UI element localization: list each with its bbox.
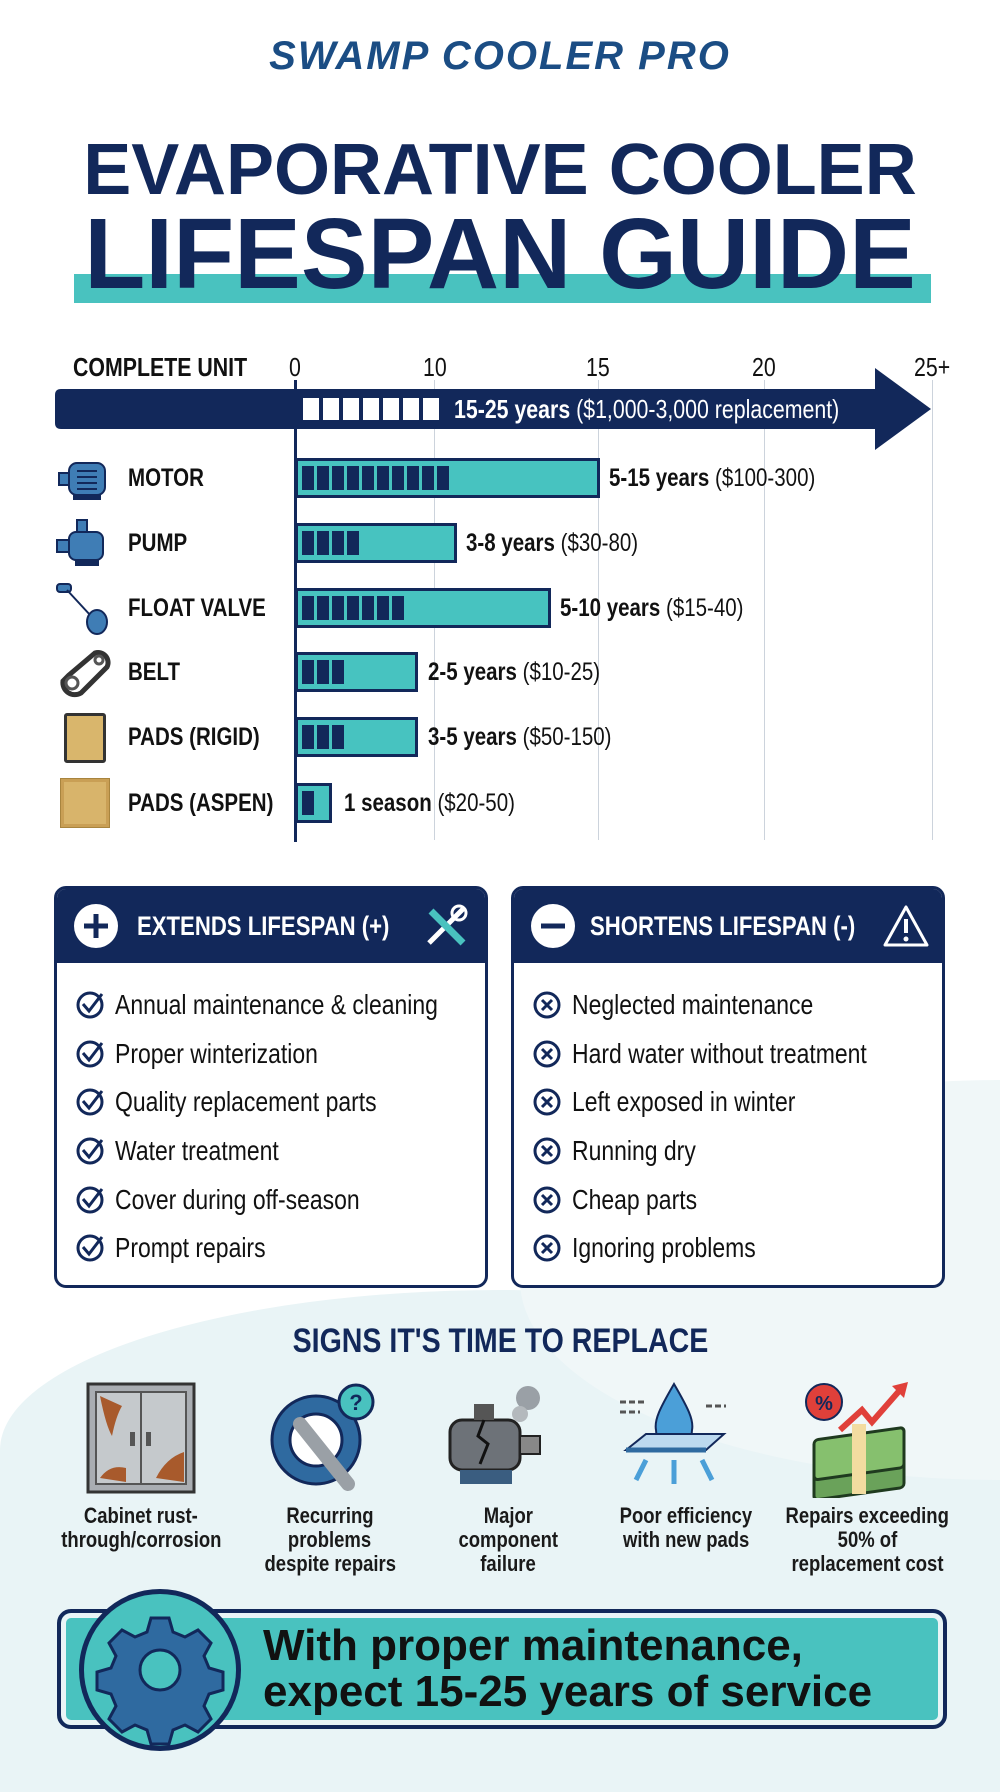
axis labels: 10 — [423, 352, 447, 382]
panel: extends lifespan — [54, 886, 488, 1288]
icon: gear wrench: ? — [349, 1390, 363, 1415]
text: PADS (ASPEN) — [128, 789, 273, 817]
panel header — [514, 889, 942, 963]
background wave — [0, 1290, 1000, 1792]
complete unit arrow — [55, 368, 931, 450]
text: 50% of — [837, 1527, 897, 1552]
icon: money — [805, 1382, 908, 1498]
icon: water drop efficiency — [620, 1382, 726, 1484]
text: FLOAT VALVE — [128, 594, 266, 622]
panel: shortens lifespan: Cheap parts — [572, 1184, 697, 1215]
row: motor — [58, 462, 106, 500]
text: MOTOR — [128, 464, 204, 492]
row: belt — [60, 650, 111, 698]
icon: rusty cabinet — [86, 1382, 196, 1494]
panel: shortens lifespan: Neglected maintenance — [572, 989, 813, 1020]
panel: shortens lifespan: Running dry — [572, 1135, 696, 1166]
axis labels — [73, 352, 950, 382]
axis labels: 25+ — [914, 352, 950, 382]
text: 3-5 years ($50-150) — [428, 723, 612, 751]
text: BELT — [128, 658, 180, 686]
text: Major — [483, 1503, 533, 1528]
text: PADS (RIGID) — [128, 723, 260, 751]
panel header: EXTENDS LIFESPAN (+) — [137, 911, 389, 941]
panel: extends lifespan: Water treatment — [115, 1135, 279, 1166]
main title — [74, 130, 931, 310]
text: 5-10 years ($15-40) — [560, 594, 744, 622]
icon: gear wrench — [270, 1384, 374, 1491]
text: 2-5 years ($10-25) — [428, 658, 600, 686]
panel: shortens lifespan: Ignoring problems — [572, 1232, 756, 1263]
callout text — [263, 1621, 872, 1716]
panel: shortens lifespan: Left exposed in winter — [572, 1086, 795, 1117]
text: 1 season ($20-50) — [344, 789, 515, 817]
text: problems — [288, 1527, 372, 1552]
icon: money: % — [815, 1393, 833, 1415]
text: component — [458, 1527, 558, 1552]
panel: extends lifespan: Quality replacement parts — [115, 1086, 377, 1117]
axis labels: 0 — [289, 352, 301, 382]
panel header: SHORTENS LIFESPAN (-) — [590, 911, 855, 941]
row: pads rigid — [64, 713, 106, 763]
icon: failed motor — [448, 1386, 541, 1484]
heading: signs: SIGNS IT'S TIME TO REPLACE — [292, 1322, 708, 1360]
main title: EVAPORATIVE COOLER — [83, 130, 917, 210]
brand title: SWAMP COOLER PRO — [269, 34, 731, 78]
sign captions: Cabinet rust- — [84, 1503, 198, 1528]
axis labels: 20 — [752, 352, 776, 382]
text: with new pads — [623, 1527, 749, 1552]
main title: LIFESPAN GUIDE — [84, 198, 916, 310]
panel: shortens lifespan: Hard water without treatment — [572, 1038, 867, 1069]
panel: extends lifespan: Proper winterization — [115, 1038, 318, 1069]
text: Recurring — [286, 1503, 374, 1528]
text: 5-15 years ($100-300) — [609, 464, 815, 492]
row: pads aspen — [60, 778, 110, 828]
panel: extends lifespan: Prompt repairs — [115, 1232, 266, 1263]
text: Poor efficiency — [620, 1503, 752, 1528]
panel header — [57, 889, 485, 963]
row: float valve — [56, 583, 108, 635]
panel: shortens lifespan — [511, 886, 945, 1288]
sign captions: through/corrosion — [61, 1527, 221, 1552]
axis labels: COMPLETE UNIT — [73, 352, 247, 382]
sign captions — [61, 1503, 221, 1552]
text: Repairs exceeding — [785, 1503, 949, 1528]
callout banner — [57, 1589, 947, 1751]
panel: extends lifespan: Cover during off-season — [115, 1184, 360, 1215]
panel: extends lifespan: Annual maintenance & cleaning — [115, 989, 438, 1020]
text: replacement cost — [791, 1551, 943, 1576]
text: despite repairs — [264, 1551, 396, 1576]
complete unit arrow: 15-25 years ($1,000-3,000 replacement) — [454, 394, 839, 424]
text: failure — [480, 1551, 536, 1576]
text: PUMP — [128, 529, 187, 557]
row: pump — [56, 519, 104, 566]
axis labels: 15 — [586, 352, 610, 382]
callout text: expect 15-25 years of service — [263, 1667, 872, 1716]
callout text: With proper maintenance, — [263, 1621, 803, 1670]
icon: gear badge — [79, 1589, 241, 1751]
text: 3-8 years ($30-80) — [466, 529, 638, 557]
